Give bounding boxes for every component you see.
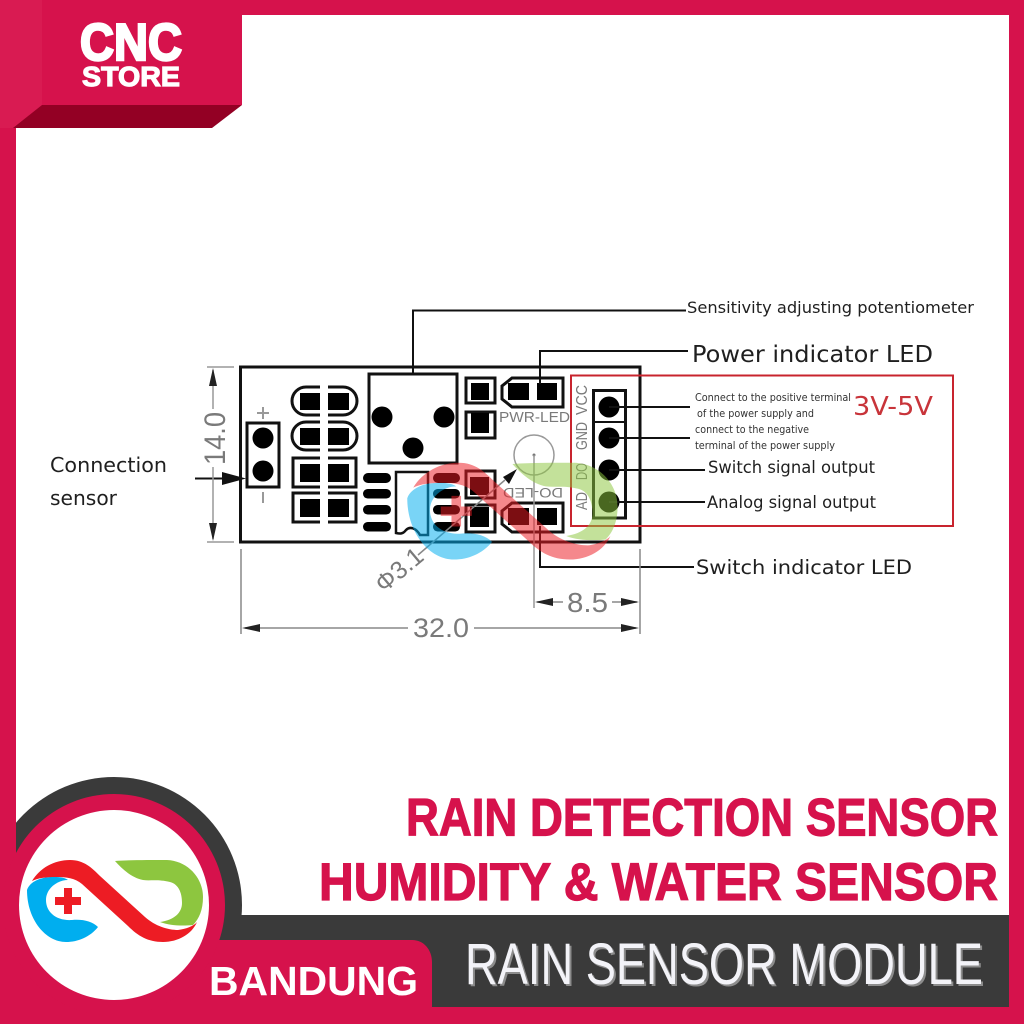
connection sensor label [50, 453, 167, 510]
switch LED leader [540, 526, 694, 567]
switch signal label: Switch signal output [708, 458, 875, 478]
voltage label: 3V-5V [853, 392, 933, 422]
IC outline [396, 472, 428, 535]
store logo [80, 14, 182, 92]
width dimension [241, 549, 640, 643]
power pin description: connect to the negative [695, 424, 809, 436]
store logo: STORE [82, 61, 180, 92]
left SMD pads [292, 384, 357, 526]
PWR-LED silkscreen label: PWR-LED [499, 409, 570, 426]
diameter label: Φ3.1 [370, 542, 429, 598]
power pin description: Connect to the positive terminal [695, 392, 851, 404]
board outline [240, 367, 640, 542]
watermark logo [407, 463, 618, 560]
power pin description: terminal of the power supply [695, 440, 835, 452]
connection sensor label: sensor [50, 486, 118, 510]
pin labels: DO [574, 463, 591, 480]
analog signal label: Analog signal output [707, 493, 876, 513]
potentiometer leader [413, 310, 686, 374]
wiring diagram [50, 298, 974, 643]
Bandung label: BANDUNG [209, 958, 418, 1004]
pin labels: GND [574, 422, 591, 450]
power LED label: Power indicator LED [692, 340, 933, 368]
pin offset dimension: 8.5 [567, 587, 608, 618]
power LED leader [540, 351, 688, 384]
DO-LED silkscreen label: DO-LED [503, 485, 563, 501]
connection arrow [195, 472, 246, 485]
pin labels: VCC [574, 385, 591, 415]
power pin description [695, 392, 851, 452]
height dimension [199, 367, 234, 542]
potentiometer footprint [369, 374, 457, 463]
bottom dark banner [0, 770, 1009, 1024]
store badge ribbon [0, 0, 1024, 128]
red name tab [0, 940, 1024, 1024]
width dimension: 32.0 [413, 613, 469, 643]
switch LED label: Switch indicator LED [696, 556, 912, 579]
sensor connector footprint [247, 407, 279, 503]
logo: infinity with cross [27, 860, 203, 942]
pin offset dimension [535, 587, 639, 618]
voltage callout box [571, 376, 953, 526]
store logo: CNC [80, 14, 182, 72]
IC pads [363, 473, 460, 532]
power pin description: of the power supply and [697, 408, 814, 420]
mounting hole and diameter arrow [418, 435, 554, 608]
logo badge [3, 794, 225, 1016]
potentiometer label: Sensitivity adjusting potentiometer [687, 298, 974, 317]
height dimension: 14.0 [199, 412, 232, 465]
pin header [594, 390, 705, 518]
pin labels: AD [574, 492, 591, 510]
pin labels [574, 385, 591, 510]
connection sensor label: Connection [50, 453, 167, 477]
right SMD pads [466, 378, 563, 532]
